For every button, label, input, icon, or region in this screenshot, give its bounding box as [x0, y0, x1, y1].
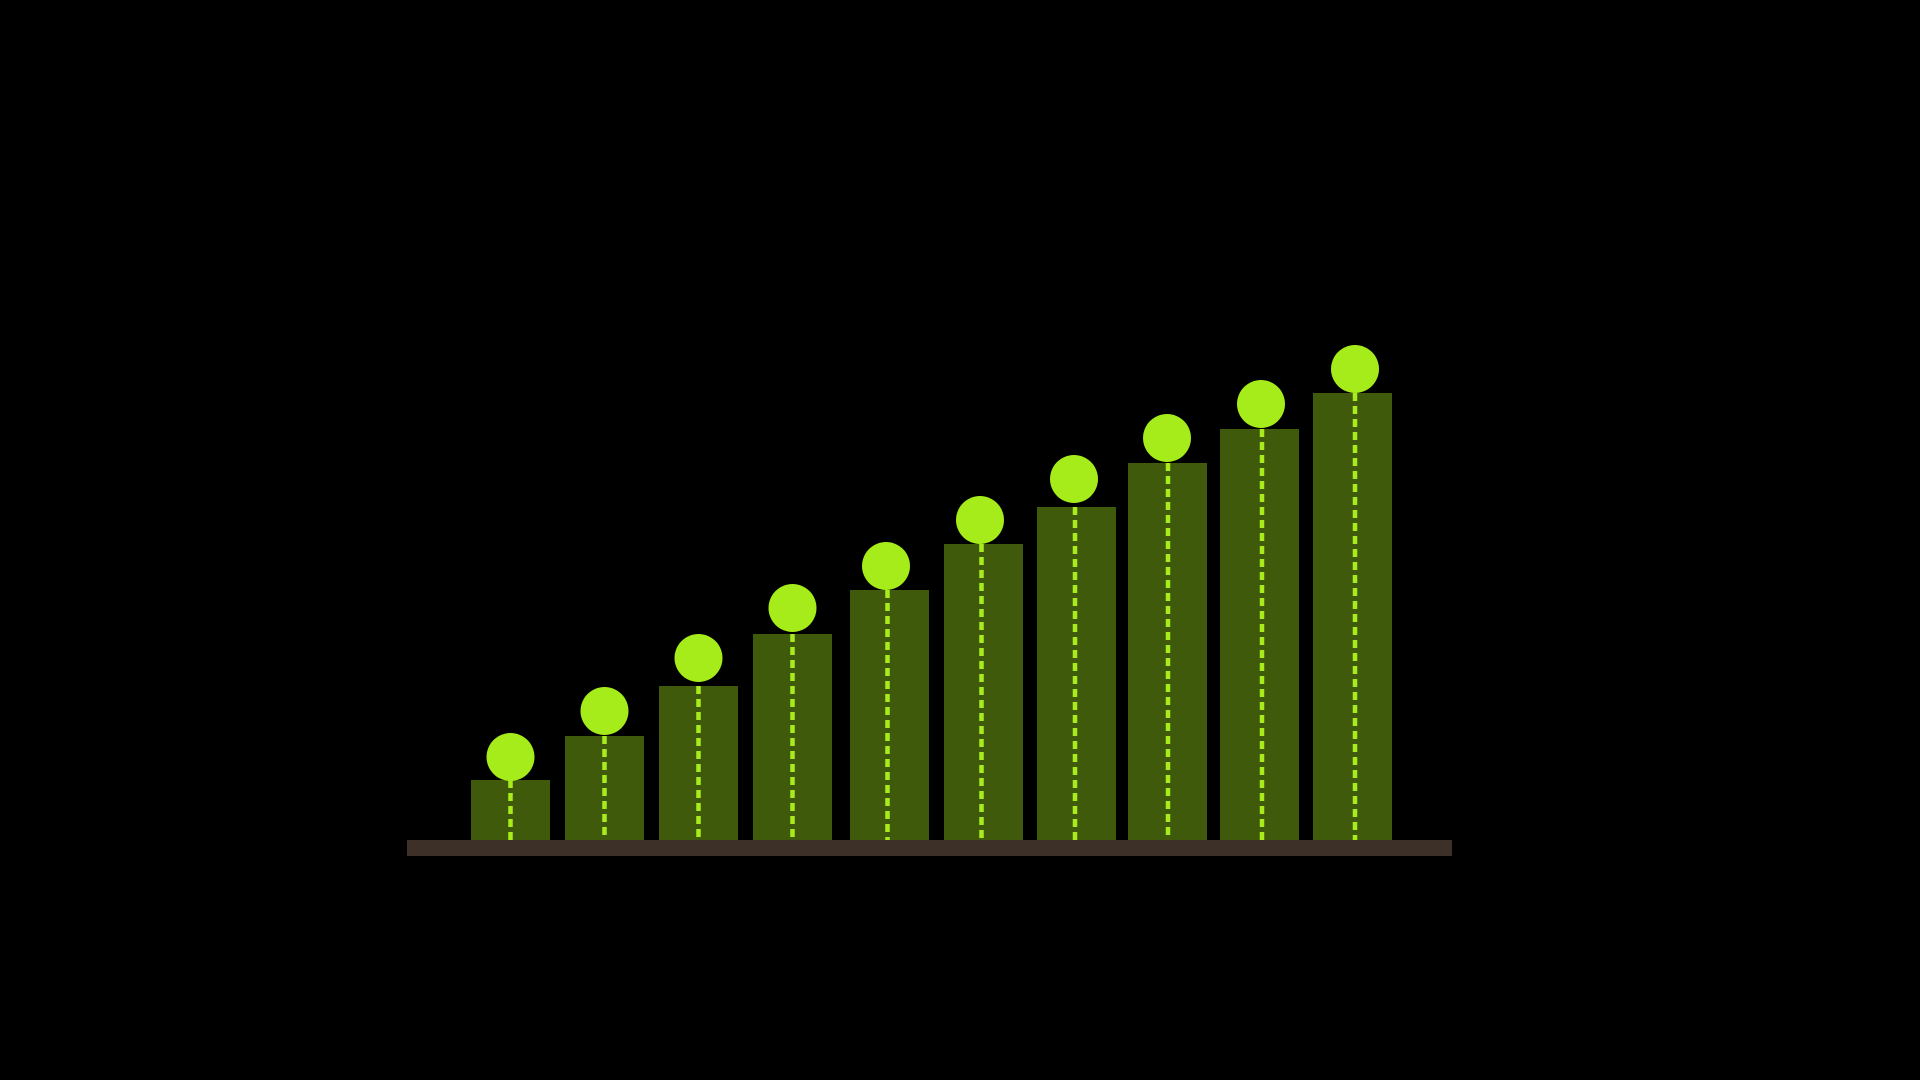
bar 7: [1037, 455, 1116, 840]
bar 1: [471, 733, 550, 840]
bar 10: [1313, 345, 1392, 840]
bar 3: [659, 634, 738, 840]
baseline: [407, 840, 1452, 856]
bar 5: [850, 542, 929, 840]
bar 6: [944, 496, 1023, 840]
bar 2: [565, 687, 644, 840]
bar 8: [1128, 414, 1207, 840]
bar 9: [1220, 380, 1299, 840]
bar 4: [753, 584, 832, 840]
